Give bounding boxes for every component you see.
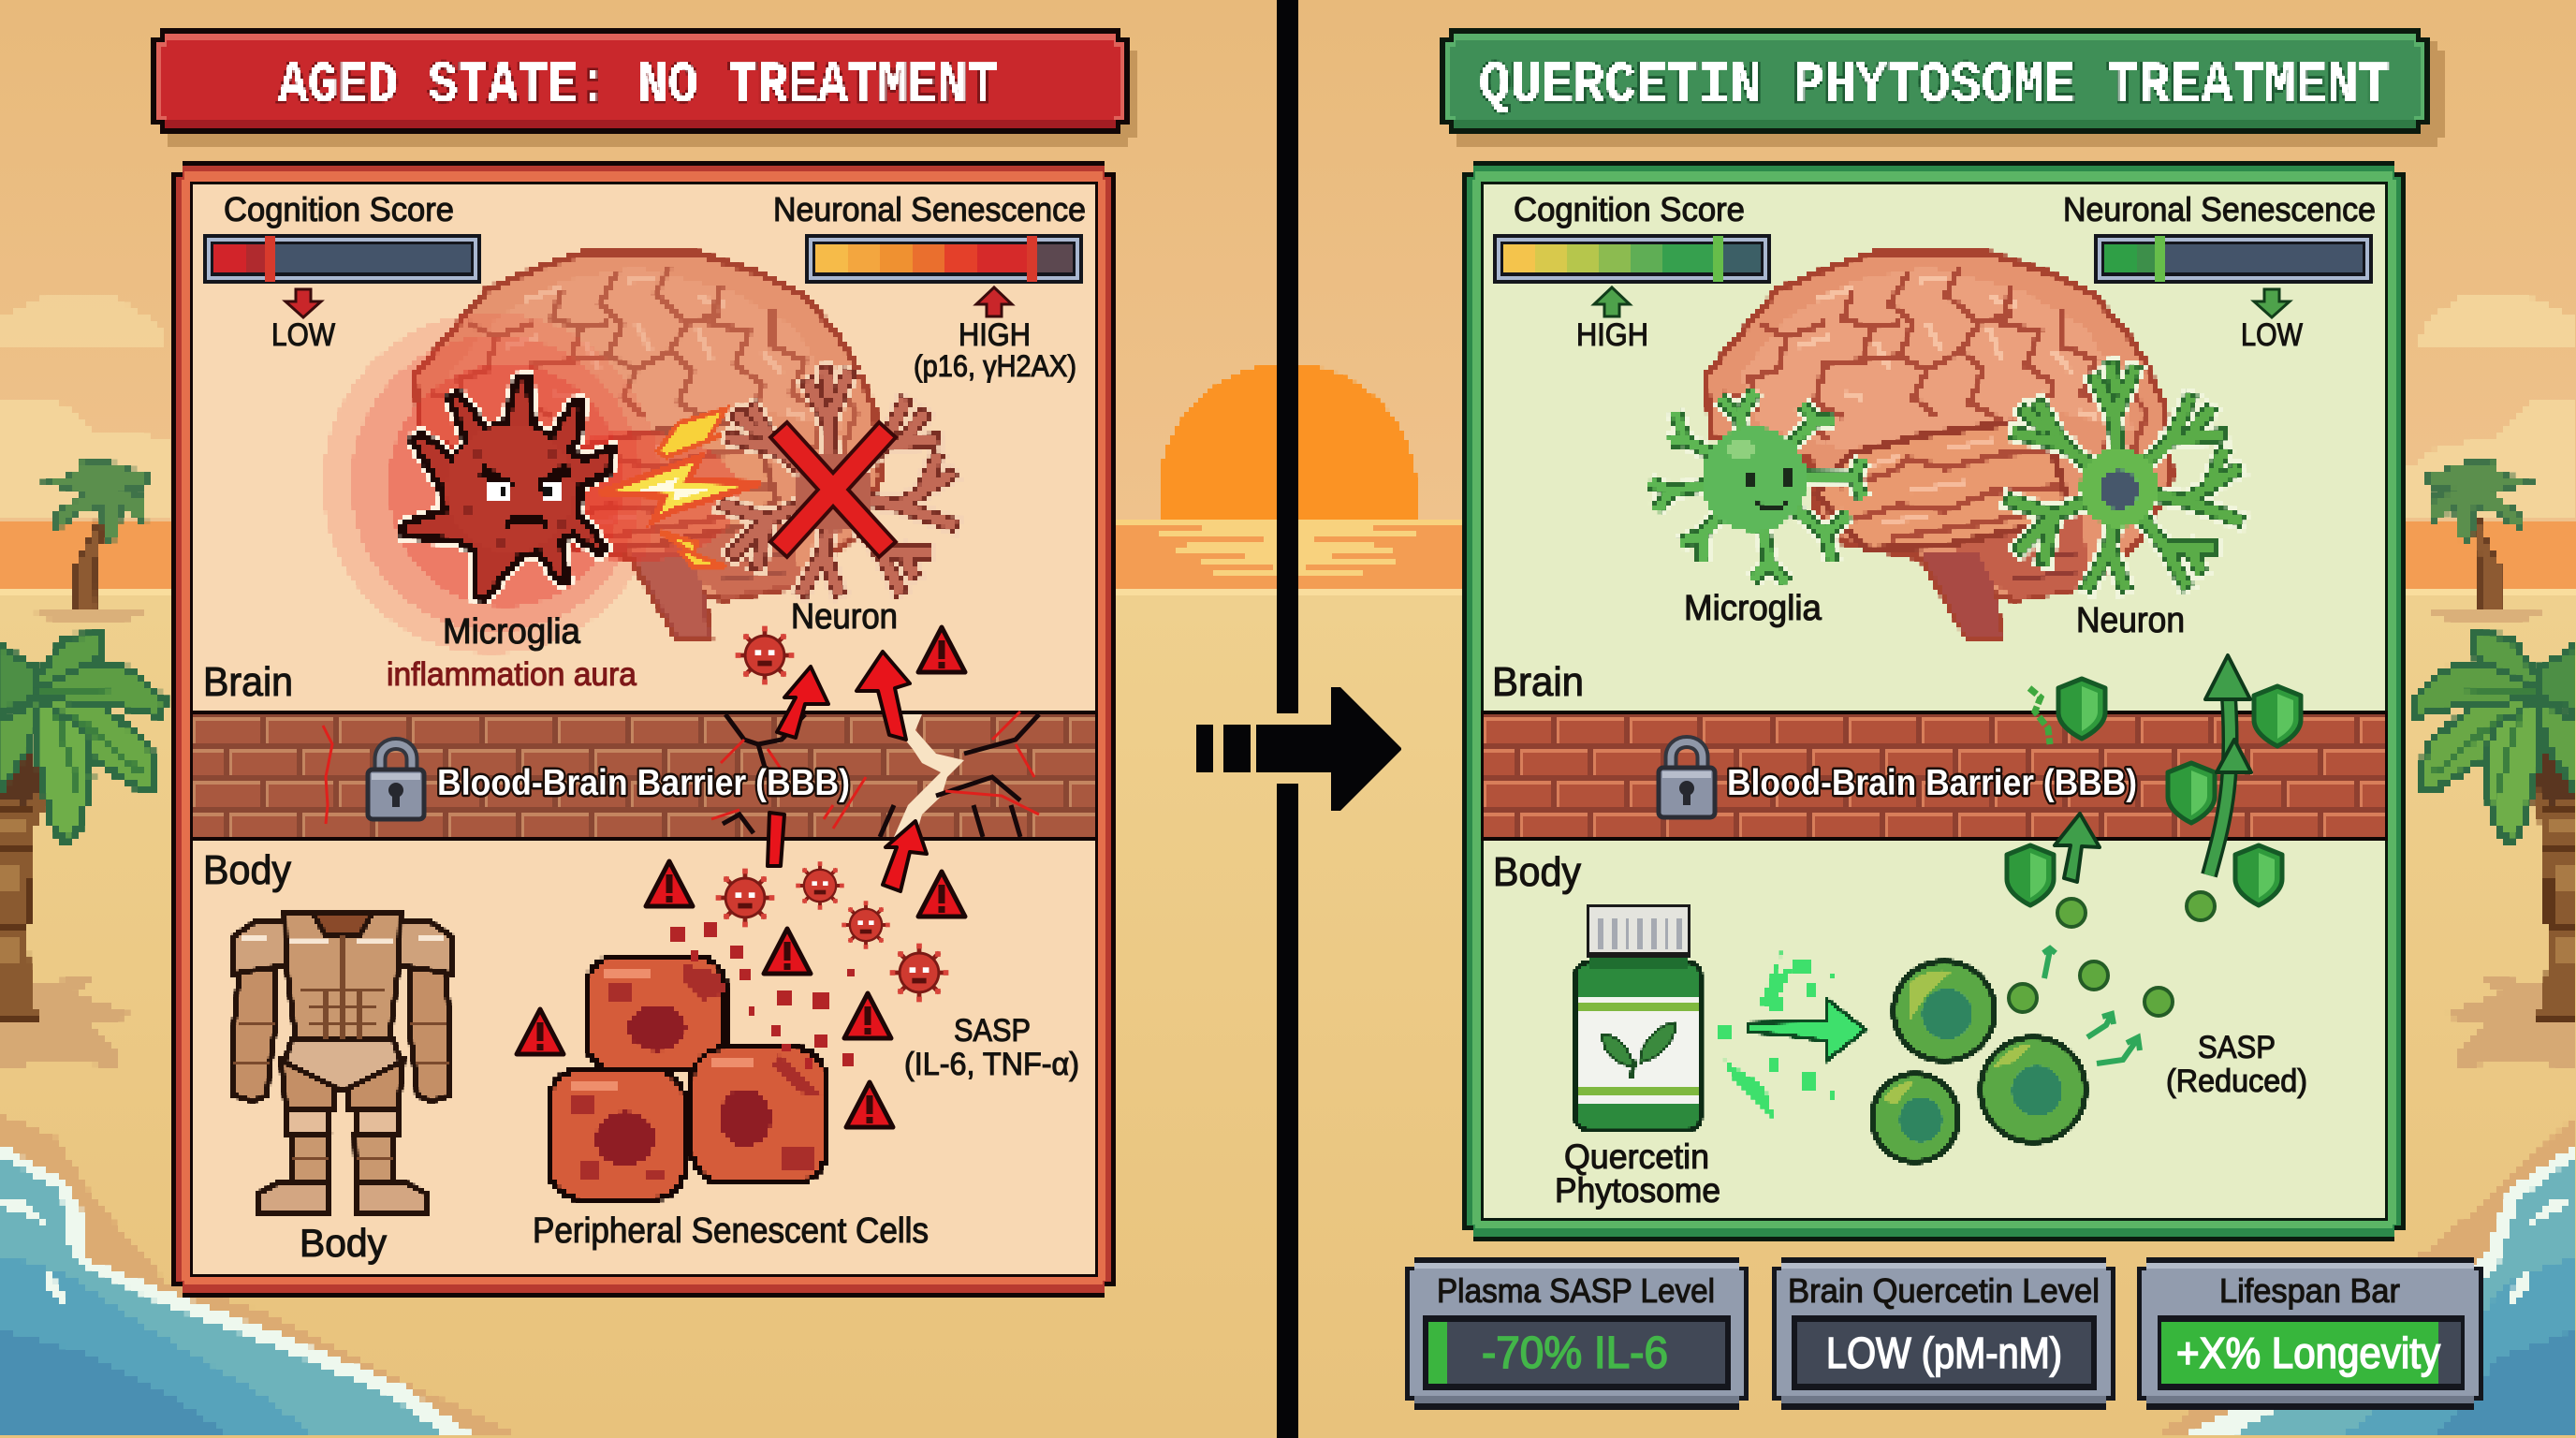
secretion debris bbox=[670, 922, 855, 1069]
panel frame bbox=[171, 161, 1116, 1298]
sea and foam bottom-right bbox=[2153, 1114, 2576, 1438]
stat value: +X% Longevity bbox=[2176, 1328, 2440, 1377]
label: body: Body bbox=[300, 1221, 387, 1265]
label: high and markers: (p16, γH2AX) bbox=[914, 349, 1076, 383]
section heading: body: Body bbox=[1493, 849, 1581, 895]
heading: cognition score: Cognition Score bbox=[1514, 190, 1745, 228]
green sparkles bbox=[1716, 947, 1836, 1119]
heading: neuronal senescence: Neuronal Senescence bbox=[2063, 190, 2376, 228]
label: microglia: Microglia bbox=[443, 612, 581, 652]
blood-brain barrier wall bbox=[190, 711, 1098, 841]
banner title text: AGED STATE: NO TREATMENT bbox=[278, 52, 998, 119]
icon: green vine bbox=[2029, 688, 2050, 744]
label: SASP factors bbox=[904, 1013, 1079, 1082]
icon: lightning bolts bbox=[600, 409, 761, 566]
label: quercetin phytosome: Quercetin bbox=[1564, 1137, 1709, 1176]
stat box: lifespan bar bbox=[2137, 1257, 2483, 1410]
banner: quercetin treatment bbox=[1440, 28, 2445, 147]
palm trees right bbox=[2411, 461, 2576, 1069]
blood-brain barrier wall intact bbox=[1481, 711, 2388, 841]
label: low: LOW bbox=[2241, 317, 2303, 353]
clouds bbox=[0, 292, 2576, 520]
arrow: senescence up bbox=[976, 287, 1012, 316]
label: BBB: Blood-Brain Barrier (BBB) bbox=[437, 763, 850, 803]
SASP virus particles bbox=[716, 626, 948, 1002]
label: neuron: Neuron bbox=[791, 597, 898, 637]
icon: green delivery arrow bbox=[1749, 999, 1866, 1061]
banner: aged state bbox=[151, 28, 1137, 147]
label: SASP reduced: SASP bbox=[2198, 1030, 2276, 1065]
gauge: senescence low bbox=[2094, 234, 2373, 284]
stat box: plasma SASP level bbox=[1405, 1257, 1749, 1410]
label: high and markers: HIGH bbox=[959, 317, 1031, 353]
stat box: brain quercetin level bbox=[1772, 1257, 2115, 1410]
icon: body figure bbox=[234, 914, 451, 1212]
icon: damaged neuron bbox=[725, 373, 951, 590]
green arrows crossing barrier bbox=[2055, 655, 2251, 882]
heading: cognition score: Cognition Score bbox=[224, 190, 454, 228]
icon: red X over neuron bbox=[786, 438, 880, 541]
panel: aged state bbox=[171, 161, 1116, 1298]
brain with inflammation aura bbox=[323, 253, 881, 653]
icon: happy microglia bbox=[1649, 391, 1863, 582]
label: quercetin phytosome: Phytosome bbox=[1555, 1171, 1720, 1210]
transition arrow bbox=[1196, 687, 1401, 811]
small green arrows bbox=[2043, 948, 2140, 1064]
quercetin dots bbox=[2009, 892, 2215, 1016]
center divider line bbox=[1277, 0, 1298, 1438]
icon: padlock bbox=[1659, 741, 1715, 817]
panel frame bbox=[1462, 161, 2406, 1241]
arrow: cognition down bbox=[285, 289, 321, 317]
stat value: LOW (pM-nM) bbox=[1826, 1328, 2062, 1377]
icon: senescent cells bbox=[549, 957, 827, 1199]
stat value: -70% IL-6 bbox=[1482, 1328, 1668, 1378]
icon: angry microglia bbox=[403, 376, 613, 599]
icon: padlock bbox=[368, 743, 424, 819]
label: SASP reduced bbox=[2166, 1030, 2307, 1099]
label: SASP reduced: (Reduced) bbox=[2166, 1064, 2307, 1099]
label: quercetin phytosome bbox=[1555, 1137, 1720, 1210]
sun bbox=[1159, 363, 1417, 521]
label: microglia: Microglia bbox=[1684, 589, 1822, 628]
heading: neuronal senescence: Neuronal Senescence bbox=[773, 190, 1086, 228]
gauge: senescence high bbox=[805, 234, 1083, 284]
label: inflammation aura: inflammation aura bbox=[387, 656, 637, 693]
healthy brain bbox=[1705, 253, 2172, 638]
arrow: cognition up bbox=[1594, 287, 1630, 316]
label: BBB: Blood-Brain Barrier (BBB) bbox=[1727, 763, 2137, 803]
stat title: Lifespan Bar bbox=[2219, 1271, 2400, 1310]
stat title: Brain Quercetin Level bbox=[1788, 1271, 2100, 1310]
banner title text: QUERCETIN PHYTOSOME TREATMENT bbox=[1479, 52, 2390, 119]
wall cracks bbox=[323, 712, 1039, 837]
label: high and markers bbox=[914, 317, 1076, 383]
label: high: HIGH bbox=[1576, 317, 1648, 353]
sea and foam bottom-left bbox=[0, 1114, 524, 1438]
panel: quercetin treatment bbox=[1462, 161, 2406, 1241]
section heading: body: Body bbox=[203, 847, 291, 893]
section heading: brain: Brain bbox=[203, 659, 293, 705]
icon: protective shields bbox=[2007, 679, 2301, 905]
label: low: LOW bbox=[271, 317, 335, 353]
stat title: Plasma SASP Level bbox=[1437, 1271, 1715, 1310]
red arrows breaching barrier bbox=[768, 652, 927, 891]
label: neuron: Neuron bbox=[2076, 601, 2185, 640]
section heading: brain: Brain bbox=[1492, 659, 1584, 705]
warning triangles bbox=[517, 627, 965, 1127]
icon: quercetin bottle bbox=[1575, 906, 1701, 1130]
gauge: cognition low bbox=[203, 234, 481, 284]
arrow: senescence down bbox=[2254, 289, 2290, 317]
label: SASP factors: SASP bbox=[954, 1013, 1031, 1049]
sun reflection on sea bbox=[1105, 520, 1470, 576]
icon: healthy neuron bbox=[2012, 368, 2237, 585]
icon: recovering cells bbox=[1872, 961, 2086, 1162]
label: SASP factors: (IL-6, TNF-α) bbox=[904, 1047, 1079, 1082]
palm trees left bbox=[0, 461, 165, 1069]
label: peripheral senescent cells: Peripheral Senescent Cells bbox=[533, 1211, 929, 1251]
gauge: cognition high bbox=[1493, 234, 1771, 284]
